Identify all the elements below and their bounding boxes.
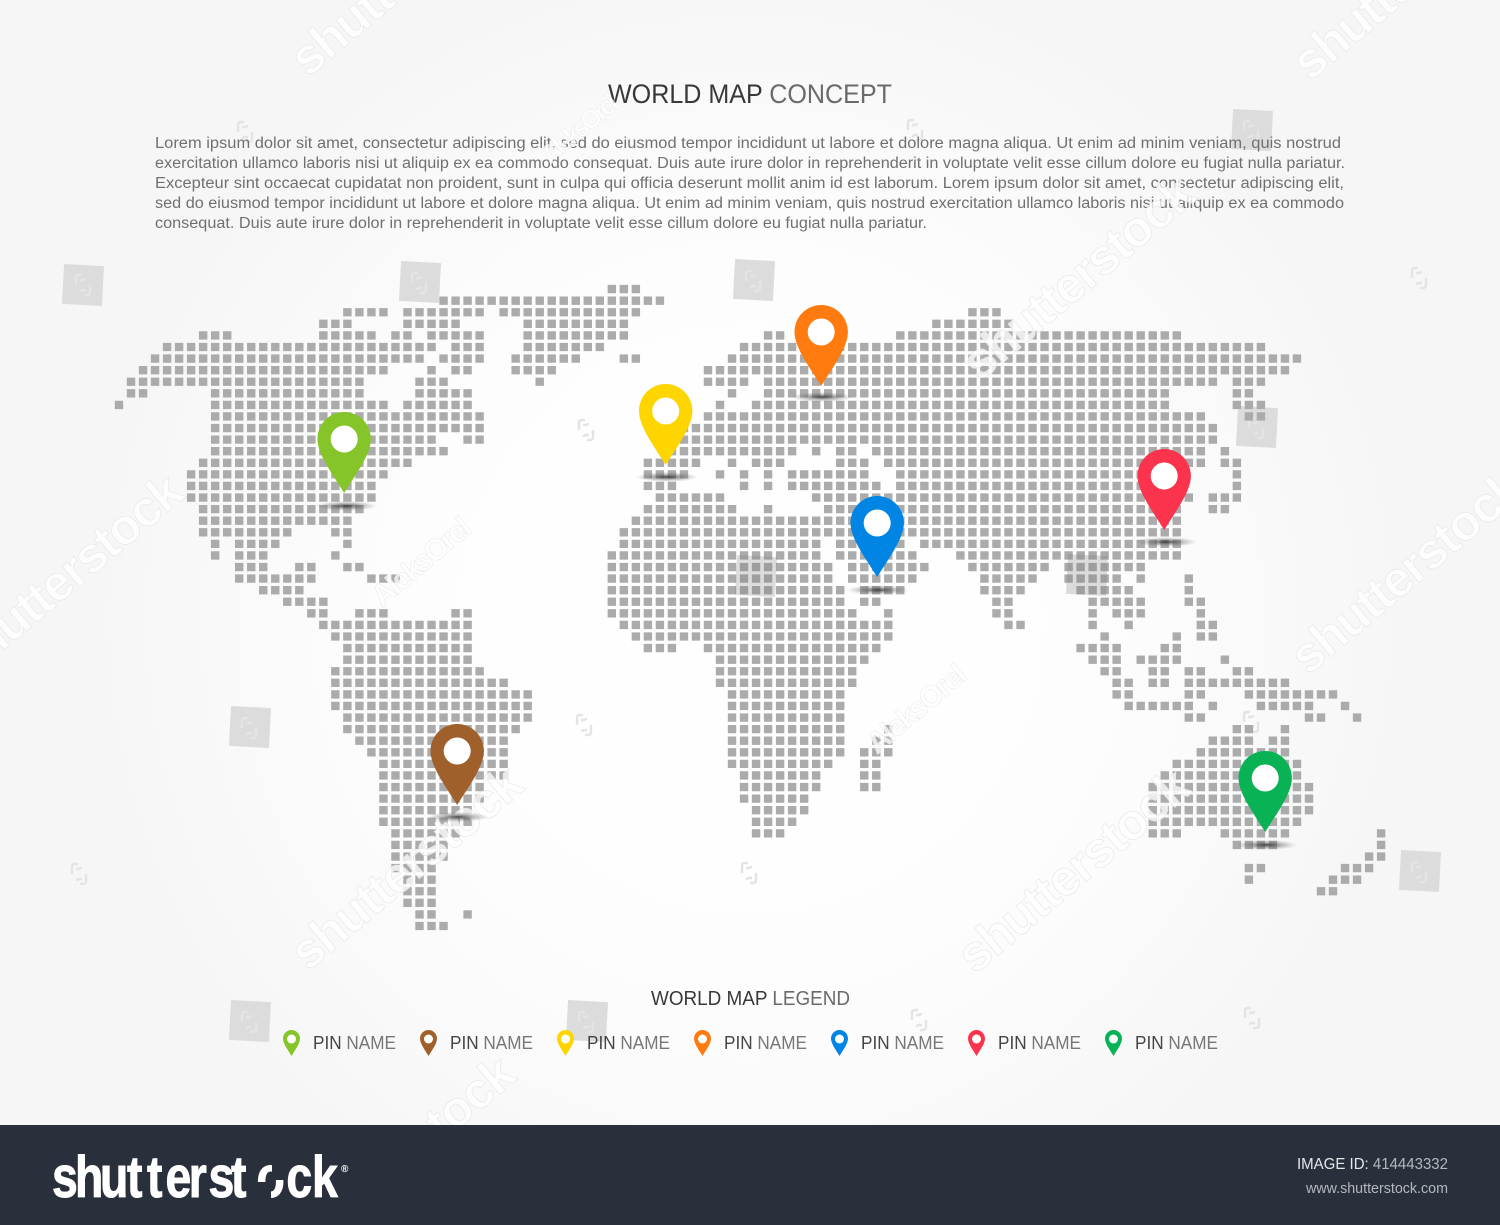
pin: blue xyxy=(850,496,904,577)
watermark text: AleksOrel xyxy=(535,87,624,170)
legend item: green: PIN NAME xyxy=(1135,1033,1218,1053)
intro paragraph xyxy=(155,135,1345,232)
pin: orange xyxy=(794,305,848,386)
pin: green xyxy=(1238,751,1292,832)
watermark text: shutterstock xyxy=(946,757,1201,983)
title: WORLD MAP CONCEPT xyxy=(608,79,892,109)
watermark text: AleksOrel xyxy=(365,511,478,613)
watermark squares over map xyxy=(735,554,1108,597)
watermark squares xyxy=(62,109,1441,1042)
dotted world map xyxy=(115,289,1389,926)
legend item: blue: PIN NAME xyxy=(861,1033,944,1053)
legend item: red xyxy=(968,1030,1081,1056)
footer logo: shutterstock xyxy=(52,1145,339,1210)
watermark text: AleksOrel xyxy=(860,658,973,760)
legend item: orange: PIN NAME xyxy=(724,1033,807,1053)
legend item: blue xyxy=(831,1030,944,1056)
intro paragraph: consequat. Duis aute irure dolor in reprehenderit in voluptate velit esse cillum dolore eu fugiat nulla pariatur. xyxy=(155,215,927,232)
watermark text: shutterstock xyxy=(279,754,534,980)
legend item: orange xyxy=(694,1030,807,1056)
intro paragraph: exercitation ullamco laboris nisi ut aliquip ex ea commodo consequat. Duis aute irure dolor in reprehenderit in voluptate velit esse cillum dolore eu fugiat nulla pariatur. xyxy=(155,155,1345,172)
legend item: red: PIN NAME xyxy=(998,1033,1081,1053)
watermark text: shutterstock xyxy=(951,164,1206,390)
legend item: light green xyxy=(283,1030,396,1056)
pin: red xyxy=(1138,449,1191,530)
legend item: brown xyxy=(420,1030,533,1056)
footer bar xyxy=(0,1125,1500,1225)
pin: brown xyxy=(430,724,484,805)
watermark glyphs xyxy=(72,120,1426,1032)
footer url: www.shutterstock.com xyxy=(1305,1181,1448,1197)
legend item: green xyxy=(1105,1030,1218,1056)
intro paragraph: Lorem ipsum dolor sit amet, consectetur adipiscing elit, sed do eiusmod tempor incididunt ut labore et dolore magna aliqua. Ut enim ad minim veniam, quis nostrud xyxy=(155,135,1341,152)
footer logo: ® xyxy=(341,1164,349,1175)
intro paragraph: sed do eiusmod tempor incididunt ut labore et dolore magna aliqua. Ut enim ad minim veniam, quis nostrud exercitation ullamco laboris nisi ut aliquip ex ea commodo xyxy=(155,195,1344,212)
pin: light green xyxy=(318,412,371,493)
pin shadows xyxy=(315,392,1297,850)
legend item: yellow xyxy=(557,1030,670,1056)
legend item: yellow: PIN NAME xyxy=(587,1033,670,1053)
intro paragraph: Excepteur sint occaecat cupidatat non proident, sunt in culpa qui officia deserunt mollit anim id est laborum. Lorem ipsum dolor sit amet, consectetur adipiscing elit, xyxy=(155,175,1344,192)
legend xyxy=(283,1030,1218,1056)
legend title: WORLD MAP LEGEND xyxy=(651,988,850,1010)
pin: yellow xyxy=(639,384,692,465)
image id: IMAGE ID: 414443332 xyxy=(1297,1156,1448,1173)
legend item: brown: PIN NAME xyxy=(450,1033,533,1053)
legend item: light green: PIN NAME xyxy=(313,1033,396,1053)
